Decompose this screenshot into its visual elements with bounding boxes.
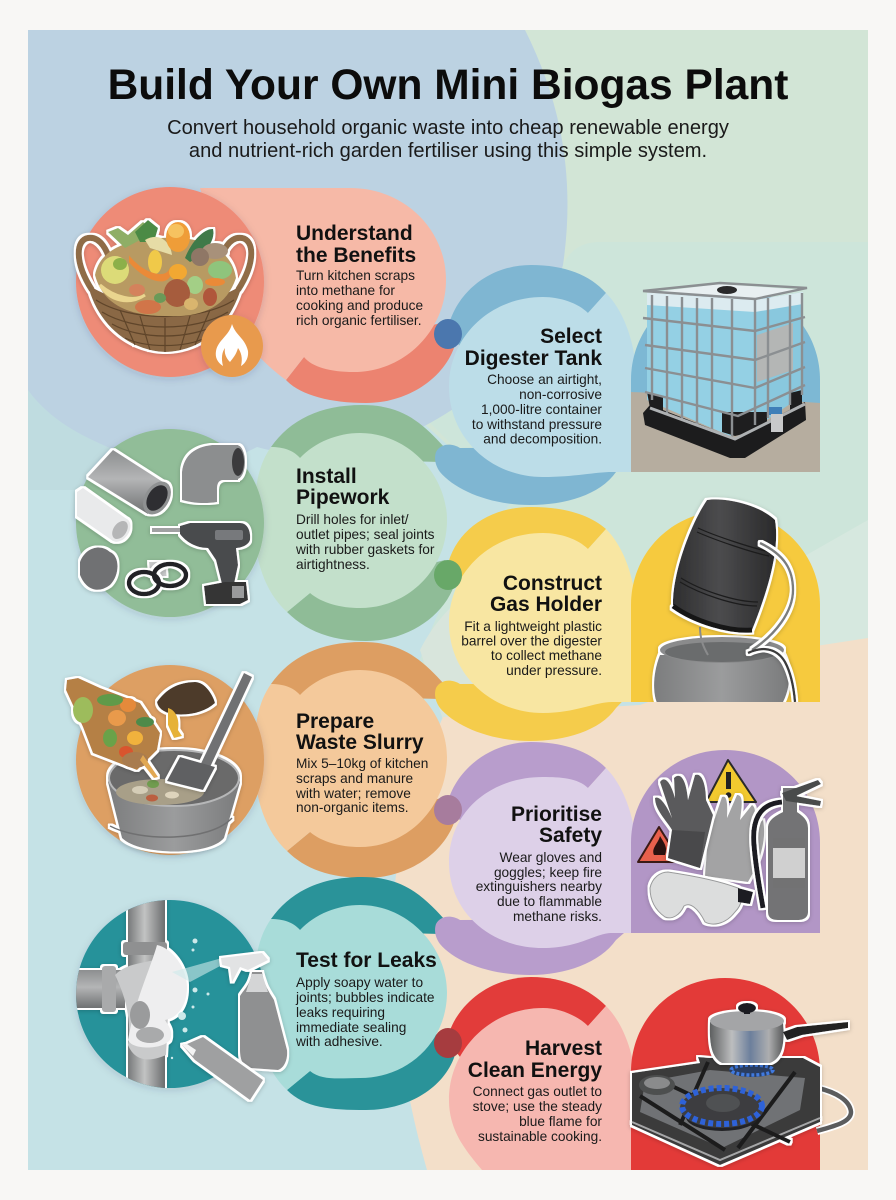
- elbow: [182, 445, 245, 503]
- text: prioritise safety: goggles; keep fire: [494, 865, 602, 880]
- text: construct gas holder: Fit a lightweight plastic: [464, 619, 602, 634]
- text: select digester tank: 1,000-litre container: [481, 402, 602, 417]
- text: construct gas holder: Construct: [503, 572, 602, 595]
- text: construct gas holder: under pressure.: [506, 663, 602, 678]
- dot: [434, 1028, 462, 1058]
- text: harvest clean energy: blue flame for: [519, 1114, 602, 1129]
- subtitle: [167, 117, 729, 162]
- bucket: [108, 750, 240, 852]
- bottom arc: [286, 322, 457, 403]
- text: construct gas holder: barrel over the digester: [461, 634, 602, 648]
- arcs: [271, 877, 457, 1110]
- image circle: [76, 900, 264, 1088]
- text: select digester tank: non-corrosive: [519, 387, 602, 402]
- saucepan: [710, 1003, 848, 1063]
- panel: step 7 test for leaks: [70, 877, 457, 1110]
- text: install pipework: [295, 465, 435, 572]
- spray bottle: [221, 953, 287, 1070]
- text: understand the benefits: Understand: [296, 222, 413, 245]
- text: select digester tank: Digester Tank: [465, 347, 602, 370]
- subtitle: and nutrient-rich garden fertiliser using this simple system.: [189, 140, 707, 162]
- text: construct gas holder: to collect methane: [491, 648, 602, 663]
- icon: pipes and tools: [77, 445, 250, 604]
- arch backdrop: [631, 511, 820, 702]
- arcs: [435, 265, 640, 505]
- photo: ibc tank: [631, 283, 820, 472]
- text: prepare waste slurry: Prepare: [296, 710, 374, 733]
- text: select digester tank: [465, 325, 602, 446]
- text: construct gas holder: Gas Holder: [490, 593, 602, 616]
- text: install pipework: outlet pipes; seal joints: [296, 527, 435, 542]
- photo: safety gear: [638, 760, 821, 924]
- text: select digester tank: Choose an airtight,: [487, 372, 602, 387]
- text: prepare waste slurry: non-organic items.: [296, 800, 409, 815]
- white pipe: [77, 488, 135, 546]
- scrap handful: [66, 678, 160, 778]
- text bubble: [254, 905, 447, 1090]
- icon: flame warning triangle: [638, 827, 681, 862]
- text bubble: [449, 1006, 637, 1170]
- stove: [632, 1057, 820, 1165]
- dot: [434, 560, 462, 590]
- text: understand the benefits: Turn kitchen scraps: [296, 268, 415, 283]
- text: prioritise safety: Safety: [539, 824, 602, 847]
- title: Build Your Own Mini Biogas Plant: [108, 62, 788, 109]
- text: prepare waste slurry: with water; remove: [295, 786, 411, 801]
- subtitle: Convert household organic waste into cheap renewable energy: [167, 117, 729, 139]
- image circle: [76, 429, 264, 617]
- text: test for leaks: immediate sealing: [296, 1020, 406, 1035]
- arch backdrop: [631, 286, 820, 472]
- icon: flame badge: [201, 315, 263, 377]
- dung and corn: [157, 682, 215, 738]
- text: prepare waste slurry: Waste Slurry: [296, 731, 424, 754]
- text: prioritise safety: extinguishers nearby: [476, 879, 602, 894]
- arc: [450, 977, 606, 1057]
- text bubble: [449, 768, 637, 948]
- text bubble: [254, 433, 447, 612]
- text: understand the benefits: cooking and produce: [296, 298, 423, 313]
- hose: [748, 543, 795, 702]
- text: harvest clean energy: stove; use the steady: [473, 1099, 602, 1114]
- panel: step 3 install pipework: [76, 405, 457, 641]
- text bubble: [200, 188, 446, 380]
- panel: step 8 harvest clean energy: [434, 977, 851, 1170]
- text bubble: [449, 529, 637, 713]
- grey pipe: [88, 450, 177, 520]
- text: install pipework: with rubber gaskets for: [295, 542, 435, 557]
- hose core: [817, 1088, 851, 1131]
- text: prepare waste slurry: Mix 5–10kg of kitchen: [296, 756, 428, 771]
- text: select digester tank: and decomposition.: [483, 432, 602, 446]
- text: install pipework: Install: [296, 465, 357, 488]
- text: test for leaks: leaks requiring: [296, 1005, 385, 1020]
- hose: [817, 1088, 851, 1131]
- icon: leaking pipe and spray: [70, 895, 287, 1100]
- dot: [434, 795, 462, 825]
- drill: [152, 523, 250, 604]
- text bubble: [254, 670, 447, 851]
- text: test for leaks: joints; bubbles indicate: [295, 990, 434, 1005]
- panel: step 6 prioritise safety: [434, 742, 821, 975]
- text: prioritise safety: due to flammable: [497, 894, 602, 909]
- text: harvest clean energy: Clean Energy: [468, 1059, 602, 1082]
- icon: dark glove: [655, 775, 713, 868]
- text: test for leaks: [295, 949, 437, 1049]
- text: test for leaks: Test for Leaks: [296, 949, 437, 972]
- panel: step 5 prepare waste slurry: [66, 642, 457, 878]
- adapter: [80, 547, 167, 590]
- arcs: [271, 642, 457, 878]
- text: prioritise safety: methane risks.: [513, 909, 602, 924]
- text: install pipework: Pipework: [296, 486, 390, 509]
- text: prepare waste slurry: scraps and manure: [296, 771, 413, 786]
- arch backdrop: [631, 750, 820, 933]
- text: install pipework: airtightness.: [296, 557, 370, 572]
- arcs: [435, 742, 640, 975]
- icon: goggles: [650, 872, 753, 924]
- adhesive tube: [182, 1037, 263, 1100]
- text: test for leaks: Apply soapy water to: [296, 975, 423, 990]
- arcs: [435, 507, 640, 741]
- icon: fire extinguisher: [754, 780, 821, 920]
- icon: bucket and scraps: [66, 673, 252, 852]
- text: prioritise safety: [476, 803, 602, 924]
- text bubble: [449, 293, 637, 477]
- text: understand the benefits: the Benefits: [296, 244, 416, 267]
- image circle: [76, 665, 264, 855]
- text: harvest clean energy: [468, 1037, 602, 1144]
- text: harvest clean energy: sustainable cooking.: [478, 1129, 602, 1144]
- text: prioritise safety: Prioritise: [511, 803, 602, 826]
- foam bubbles and mist: [171, 938, 222, 1059]
- icon: warning triangle: [706, 760, 756, 802]
- shovel: [167, 673, 252, 790]
- icon: basket of kitchen scraps: [79, 220, 251, 352]
- text: harvest clean energy: Harvest: [525, 1037, 602, 1060]
- arch backdrop: [631, 978, 820, 1170]
- text: prepare waste slurry: [295, 710, 428, 815]
- text: prioritise safety: Wear gloves and: [500, 850, 602, 865]
- icon: light glove: [695, 795, 764, 882]
- panel: step 4 construct gas holder: [434, 499, 820, 741]
- text: understand the benefits: [296, 222, 423, 328]
- text: construct gas holder: [461, 572, 602, 678]
- upper barrel: [673, 499, 776, 630]
- text: test for leaks: with adhesive.: [295, 1034, 383, 1049]
- text: understand the benefits: into methane for: [296, 283, 395, 298]
- small hose: [700, 627, 708, 655]
- text: select digester tank: to withstand pressure: [472, 417, 602, 432]
- text: select digester tank: Select: [540, 325, 602, 348]
- pipework: [70, 895, 187, 1095]
- panel: step 2 select digester tank: [434, 265, 820, 505]
- gaskets: [129, 564, 186, 594]
- dot: [434, 319, 462, 349]
- text: understand the benefits: rich organic fertiliser.: [296, 313, 422, 328]
- text: install pipework: Drill holes for inlet/: [296, 512, 409, 527]
- lower barrel: [654, 637, 789, 704]
- top and bottom arcs: [271, 405, 457, 641]
- photo: barrels and hose: [654, 499, 795, 704]
- photo: stove with blue flame: [632, 1003, 851, 1165]
- text: harvest clean energy: Connect gas outlet to: [473, 1084, 602, 1099]
- image circle: [76, 187, 264, 377]
- panel: step 1 understand the benefits: [76, 187, 457, 403]
